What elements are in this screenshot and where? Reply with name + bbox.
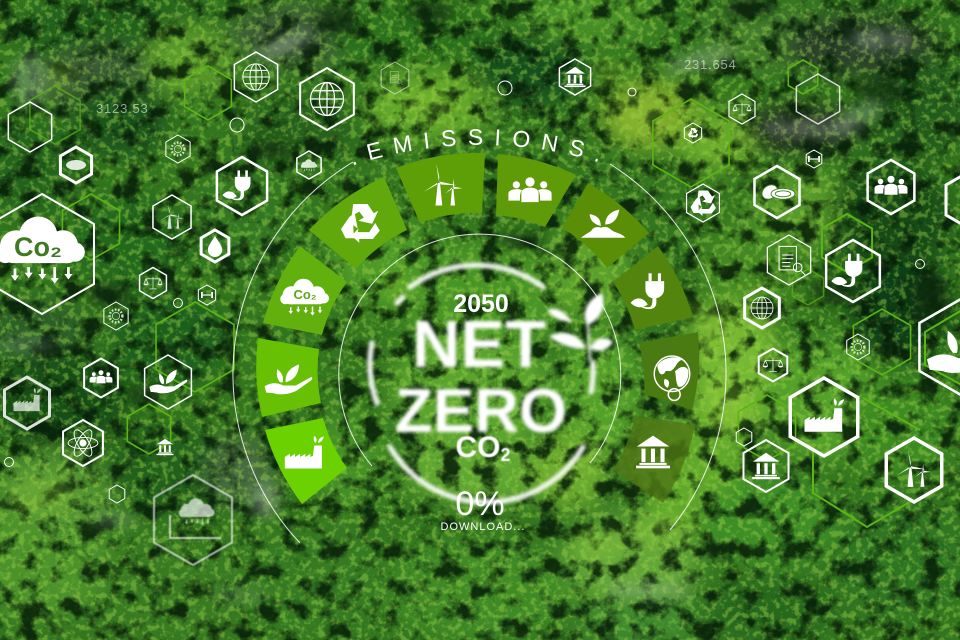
- tile: factory: [265, 418, 347, 504]
- hexagon: large CO2 cloud: Co₂: [14, 232, 62, 262]
- green hexagon network: [30, 60, 960, 527]
- small circles: [4, 81, 924, 466]
- hexagon: gear low: [104, 302, 128, 330]
- central title: net: NET: [412, 307, 546, 382]
- hexagon: globe top: [300, 68, 354, 130]
- tile: people: [496, 154, 576, 227]
- hexagon: scales right: [759, 348, 787, 382]
- hexagon: factory left: [4, 377, 50, 429]
- hexagon: document search: [767, 235, 811, 285]
- hexagon: people right: [868, 160, 914, 214]
- outer and inner rings: [233, 162, 726, 543]
- segmented ring of icon tiles: [256, 153, 699, 504]
- hexagon: scales top right: [729, 94, 755, 124]
- central label: CO2: 2: [500, 445, 511, 465]
- tile: plant: [562, 183, 649, 268]
- tile: bank: [613, 415, 695, 503]
- hexagon: recycle: [687, 184, 719, 222]
- hexagon: partial right edge: [946, 170, 960, 230]
- tile: plug: [613, 246, 693, 330]
- hexagon: globe right: [745, 288, 779, 328]
- hexagon: large CO2 cloud: [0, 194, 94, 314]
- blurred progress ring: [370, 265, 593, 502]
- hexagon: faint emblem: [381, 62, 409, 94]
- hexagon: scales: [140, 268, 166, 298]
- tile: wind turbines: [396, 153, 485, 223]
- floating numbers: 231.654: [684, 57, 737, 72]
- floating numbers: [96, 57, 737, 116]
- hexagon: coins: [754, 166, 800, 218]
- blurred sprout: [547, 293, 613, 362]
- hexagon: plug: [217, 157, 267, 215]
- hexagon: wind right: [886, 438, 942, 502]
- progress percentage: 0%: [455, 485, 505, 523]
- hexagon: thin lower: [109, 485, 125, 503]
- tile: recycle: [309, 177, 407, 269]
- hexagon: bank top: [559, 59, 591, 95]
- hexagon: factory right: [790, 378, 858, 456]
- hexagon: small recycle dot: [684, 123, 702, 143]
- hexagon: bank right: [743, 440, 789, 492]
- hexagon: small emblem: [297, 151, 321, 179]
- hexagon: dumbbell right: [806, 150, 822, 168]
- hexagon: globe left: [234, 52, 278, 102]
- hexagon: cloud: [60, 147, 92, 183]
- hexagon: people left: [84, 358, 118, 398]
- central title: zero: ZERO: [395, 377, 567, 446]
- curved heading: emissions: .EMISSIONS.: [354, 129, 598, 165]
- hexagon: thin empty: [8, 102, 52, 152]
- tile: CO2 cloud: Co₂: [293, 287, 317, 302]
- central title: 2050: 2050: [453, 290, 509, 318]
- hexagon: atom: [63, 420, 103, 466]
- tile: globe: [639, 332, 699, 410]
- hexagon: wind: [153, 195, 191, 239]
- hexagon: faint empty: [796, 74, 840, 124]
- progress label: DOWNLOAD...: [441, 521, 525, 533]
- tile: CO2 cloud: [263, 246, 347, 335]
- hexagon: hand right edge: [919, 299, 960, 395]
- hexagon: blurred cloud: [154, 475, 232, 565]
- hexagon: water drop: [201, 230, 229, 262]
- icon: bank without hexagon: [156, 439, 174, 455]
- hexagon: plug right: [826, 240, 880, 302]
- hexagon: thin small: [736, 428, 752, 446]
- hexagon: gear right: [847, 334, 869, 360]
- floating numbers: 3123.53: [96, 101, 149, 116]
- hexagon: gear small: [166, 135, 190, 163]
- tile: hand and leaves: [256, 338, 321, 417]
- hexagon: hand left: [145, 355, 191, 409]
- hexagon: dumbbell: [198, 285, 216, 305]
- central label: CO2: CO: [455, 431, 500, 464]
